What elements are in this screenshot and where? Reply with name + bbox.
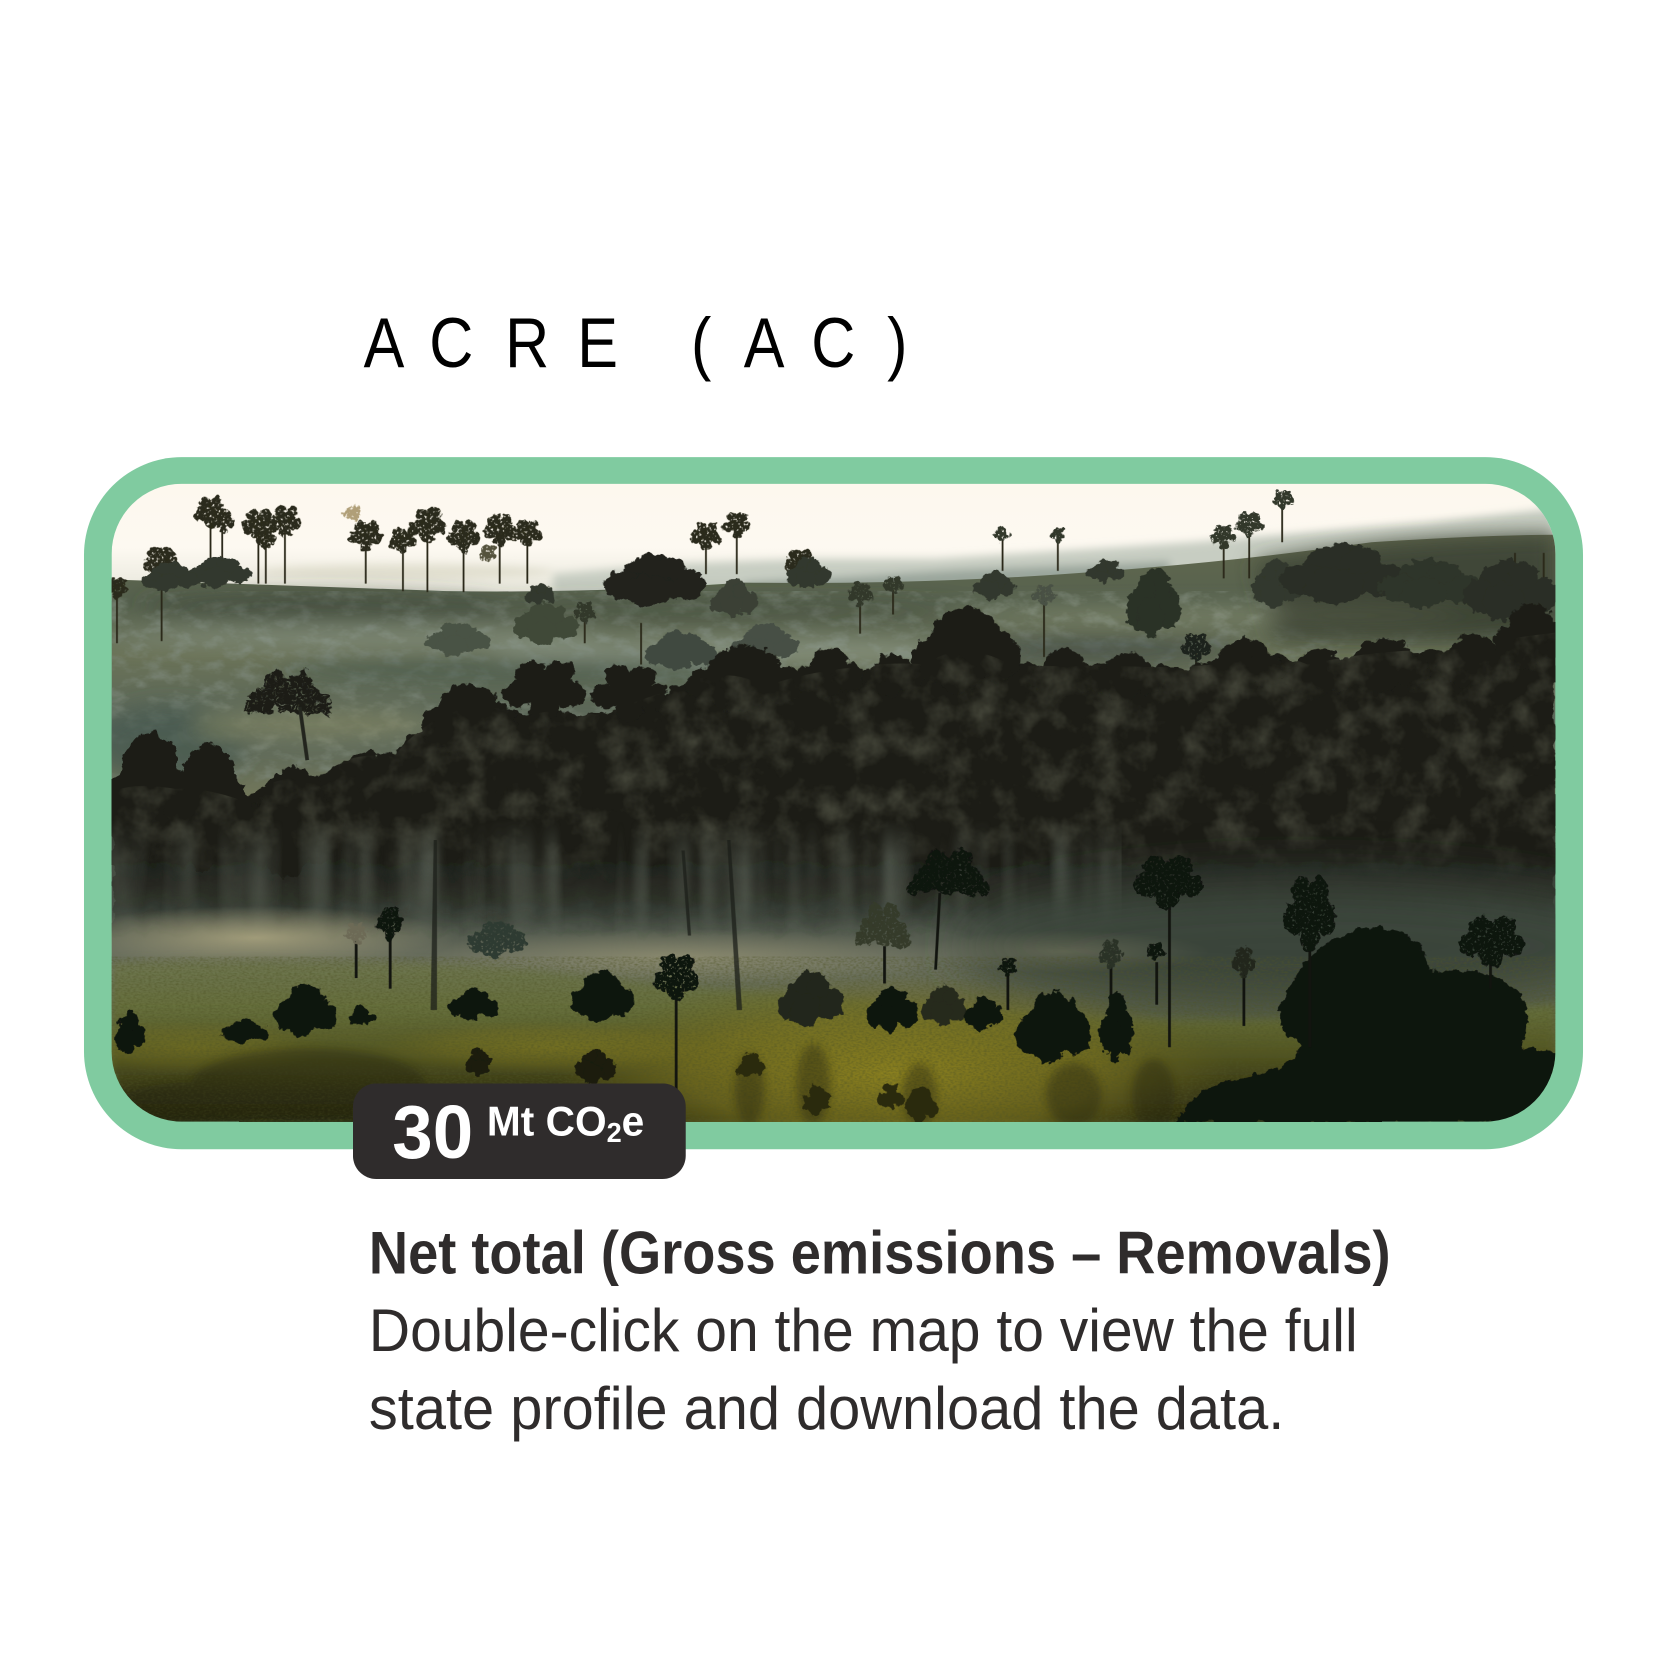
distant tree row: [573, 490, 1293, 661]
green rounded frame: [84, 457, 1583, 1149]
description text block: [369, 1219, 1391, 1442]
long tree shadows: [117, 1044, 1175, 1131]
field grain: [112, 957, 1555, 1127]
value: 30: 30: [392, 1090, 473, 1174]
unit: Mt CO2e: 2: [607, 1117, 622, 1148]
right meadow haze: [957, 880, 1658, 1012]
horizon tree trunks: [117, 505, 1544, 670]
description line 2: state profile and download the data.: [369, 1374, 1284, 1442]
vertical light shafts: [112, 825, 1122, 926]
ground: [112, 959, 1555, 1127]
panel: photo card with green frame: [53, 457, 1658, 1179]
dark forest mass: [112, 633, 1555, 936]
photo: misty Amazon forest landscape: [112, 484, 1556, 1122]
title: ACRE (AC): [364, 303, 907, 382]
trunk of lone midground tree: [300, 707, 307, 760]
long trunks: [431, 840, 742, 1010]
description line 1: Double-click on the map to view the full: [369, 1296, 1358, 1364]
unit: Mt CO2e: Mt CO: [487, 1097, 609, 1144]
foreground tree crowns: [377, 849, 1525, 1001]
golden sunlit field: [588, 983, 1202, 1122]
badge background: [353, 1083, 686, 1179]
canopy texture: [112, 633, 1555, 888]
warm glow mist: [112, 908, 432, 960]
heading: net total: Net total (Gross emissions – Removals): [369, 1219, 1391, 1287]
mist layer below forest: [112, 829, 1555, 1074]
right hill shading: [1255, 535, 1555, 638]
field texture: [112, 591, 1555, 782]
pale and thin trees: [344, 902, 1256, 977]
midground clumps: [141, 544, 1558, 670]
unit: Mt CO2e: e: [622, 1097, 644, 1144]
far haze: [255, 508, 1555, 595]
foreground shrubs: [115, 971, 1133, 1122]
value badge: [353, 1083, 686, 1179]
horizon tree crowns: [105, 497, 817, 599]
foreground tree trunks: [356, 893, 1491, 1095]
mist bands: [112, 577, 1322, 779]
canopy crowns: [102, 603, 1568, 878]
foreground dark clump: [1175, 928, 1555, 1123]
sky: [112, 484, 1555, 601]
rolling hills: [112, 535, 1555, 872]
